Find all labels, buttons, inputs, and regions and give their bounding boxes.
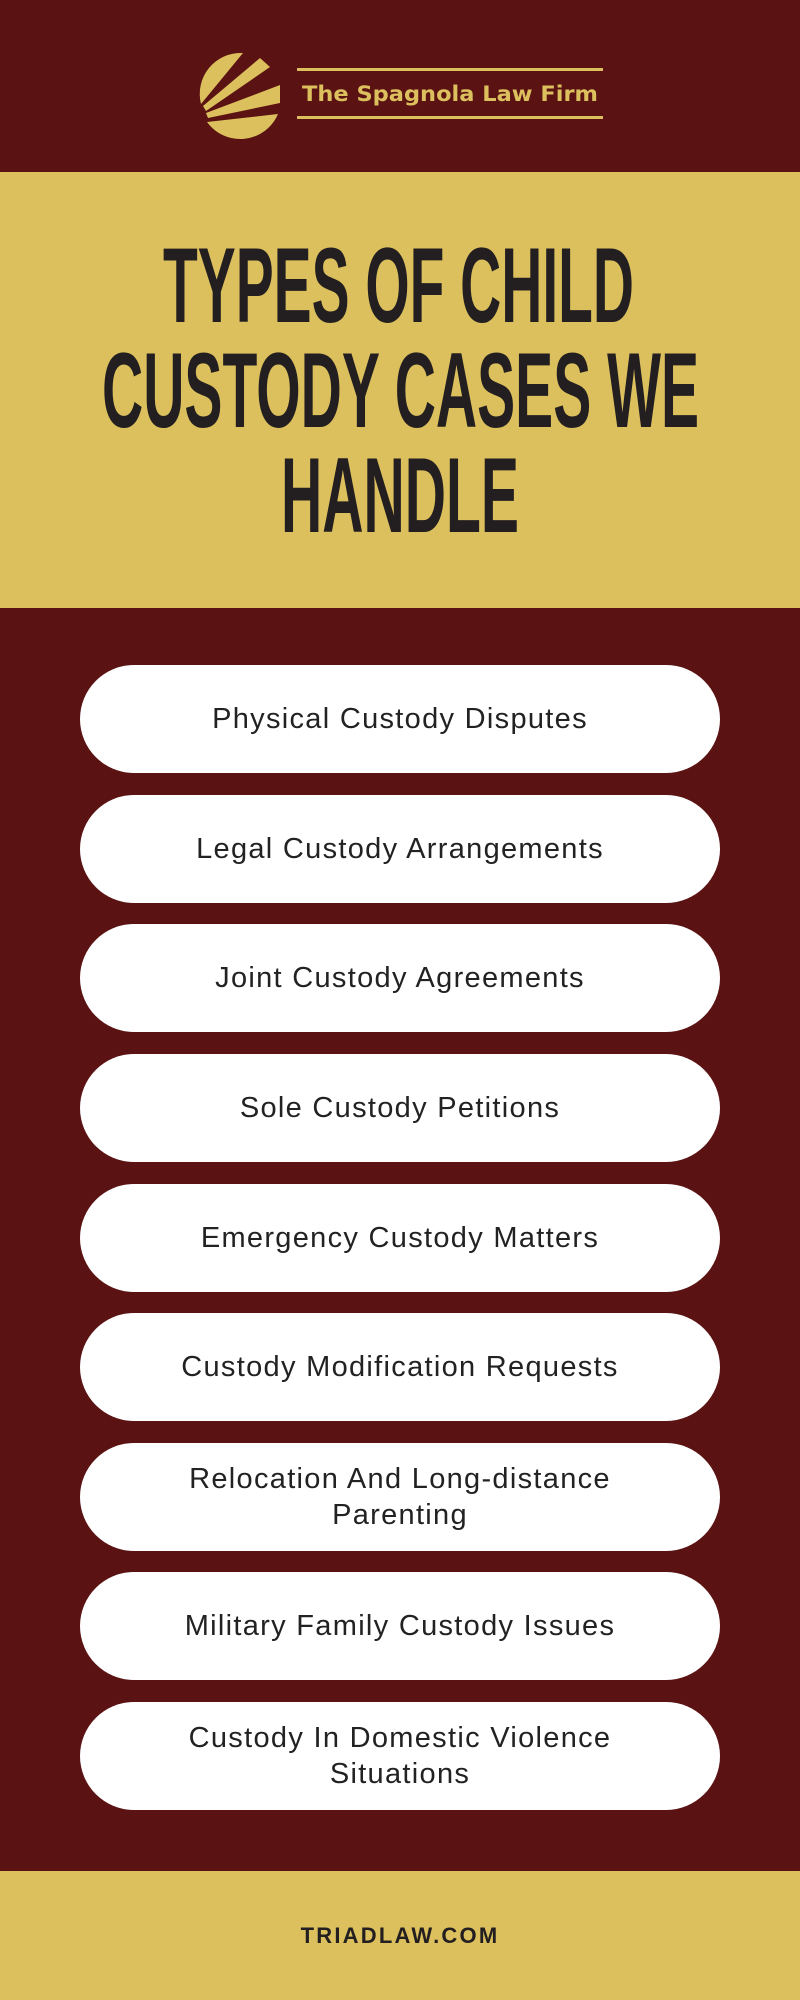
- pill: relocation: Parenting: [332, 1499, 468, 1531]
- pill: physical custody: [80, 665, 720, 773]
- logo: The Spagnola Law Firm: [302, 82, 598, 106]
- pill: emergency custody: [80, 1184, 720, 1292]
- pill: military: Military Family Custody Issues: [185, 1610, 615, 1642]
- logo: [200, 53, 603, 139]
- pill: emergency custody: Emergency Custody Matters: [201, 1222, 599, 1254]
- header band: [0, 0, 800, 170]
- pill: sole custody: [80, 1054, 720, 1162]
- pill: relocation: [80, 1443, 720, 1551]
- pill: joint custody: [80, 924, 720, 1032]
- pill: legal custody: Legal Custody Arrangements: [196, 833, 604, 865]
- pill: legal custody: [80, 795, 720, 903]
- pill: sole custody: Sole Custody Petitions: [240, 1092, 560, 1124]
- pill: physical custody: Physical Custody Disputes: [212, 703, 588, 735]
- title: HANDLE: [281, 435, 519, 555]
- pill: domestic violence: Situations: [330, 1758, 470, 1790]
- pill: domestic violence: Custody In Domestic Violence: [189, 1722, 611, 1754]
- footer url: TRIADLAW.COM: [301, 1922, 499, 1948]
- title: [102, 225, 699, 555]
- title band: [0, 172, 800, 608]
- list of case types: [80, 665, 720, 1810]
- footer band: [0, 1871, 800, 2000]
- pill: modification: [80, 1313, 720, 1421]
- pill: joint custody: Joint Custody Agreements: [215, 962, 585, 994]
- pill: relocation: Relocation And Long-distance: [189, 1463, 611, 1495]
- pill: modification: Custody Modification Requests: [181, 1351, 619, 1383]
- pill: military: [80, 1572, 720, 1680]
- pill: domestic violence: [80, 1702, 720, 1810]
